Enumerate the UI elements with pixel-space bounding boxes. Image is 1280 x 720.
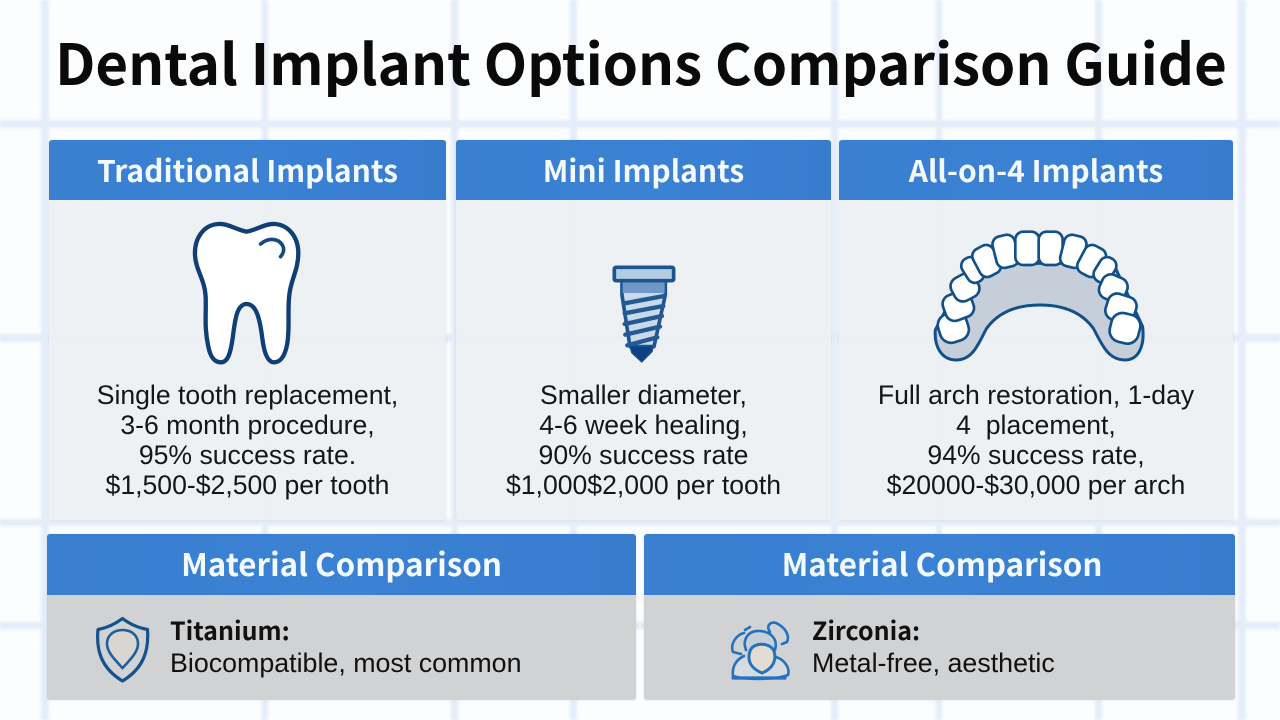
text: zirconia [812, 612, 1055, 678]
icon: dental arch [934, 230, 1145, 362]
panel: all-on-4 implants [839, 140, 1233, 520]
text: titanium [170, 612, 521, 678]
text: titanium: Biocompatible, most common [170, 648, 521, 678]
text: zirconia: Metal-free, aesthetic [812, 648, 1055, 678]
text: traditional implants details: 95% success rate. [139, 440, 356, 470]
heading: mini implants: Mini Implants [543, 147, 744, 191]
heading: traditional implants [49, 140, 446, 200]
text: all-on-4 details: 94% success rate, [927, 440, 1145, 470]
text: all-on-4 details: $20000-$30,000 per arch [887, 470, 1185, 500]
heading: mini implants [456, 140, 831, 200]
text: all-on-4 details: 4 placement, [956, 410, 1116, 440]
panel: mini implants [456, 140, 831, 520]
text: traditional implants details: Single tooth replacement, [97, 380, 398, 410]
panel: material comparison titanium [47, 534, 636, 700]
text: traditional implants details: $1,500-$2,500 per tooth [106, 470, 389, 500]
heading: material comparison [47, 534, 636, 595]
icon: tooth [192, 222, 300, 364]
text: zirconia: Zirconia: [812, 612, 920, 648]
text: mini implants details: Smaller diameter, [540, 380, 747, 410]
text: mini implants details [506, 380, 781, 500]
heading: all-on-4 implants [839, 140, 1233, 200]
text: all-on-4 details [878, 380, 1194, 500]
icon: zirconia crystal [730, 621, 790, 680]
panel: material comparison zirconia [644, 534, 1235, 700]
icon: shield [96, 616, 150, 683]
panel: traditional implants [49, 140, 446, 520]
text: mini implants details: $1,000$2,000 per tooth [506, 470, 781, 500]
text: traditional implants details: 3-6 month procedure, [120, 410, 375, 440]
heading: all-on-4 implants: All-on-4 Implants [909, 147, 1163, 191]
heading: material comparison: Material Comparison [181, 541, 502, 586]
text: traditional implants details [97, 380, 398, 500]
text: all-on-4 details: Full arch restoration, 1-day [878, 380, 1194, 410]
heading: traditional implants: Traditional Implants [97, 147, 398, 191]
text: mini implants details: 90% success rate [539, 440, 748, 470]
heading: material comparison [644, 534, 1235, 595]
heading: material comparison: Material Comparison [782, 541, 1102, 586]
text: mini implants details: 4-6 week healing, [539, 410, 748, 440]
text: titanium: Titanium: [170, 612, 290, 648]
title: Dental Implant Options Comparison Guide [55, 21, 1227, 102]
icon: implant screw [612, 266, 676, 363]
